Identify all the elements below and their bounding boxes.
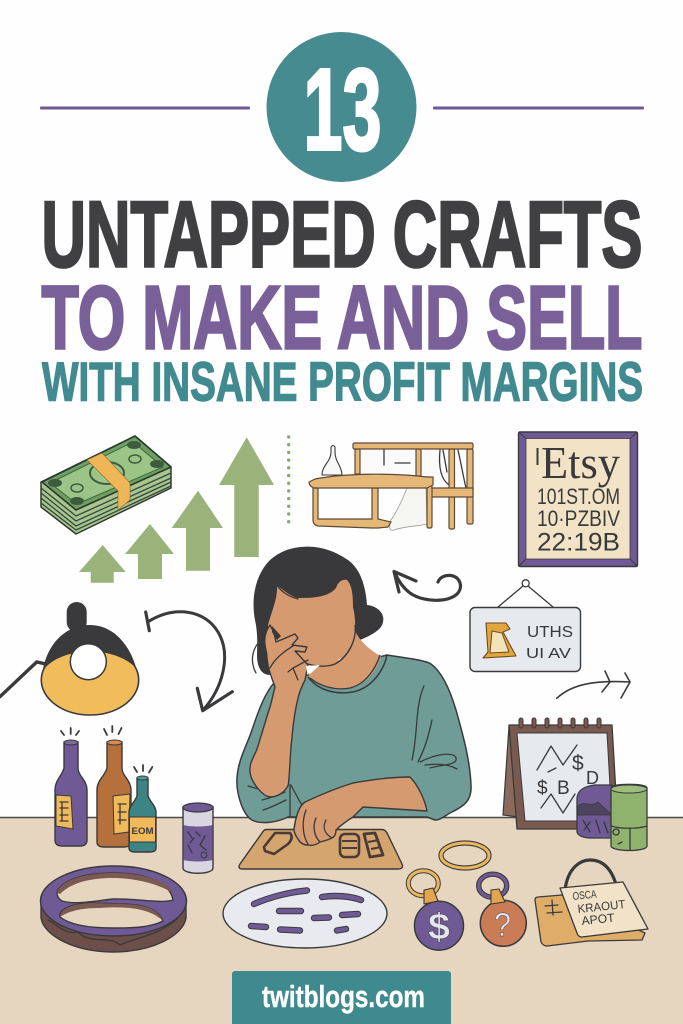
- icon: purple and green jars: [577, 784, 647, 850]
- icon: desk lamp: [0, 602, 139, 715]
- panel: framed Etsy sign: 10·PZBIV: [537, 506, 620, 531]
- icon: teal bottle: EOM: [132, 826, 154, 837]
- chart: four rising arrows: [79, 437, 274, 583]
- icon: purple bottle: [55, 728, 87, 846]
- icon: brown bottle: [97, 726, 131, 847]
- icon: calendar with doodles: B: [557, 778, 570, 799]
- icon: cutting board with pieces: [239, 830, 402, 869]
- icon: calendar with doodles: $: [537, 778, 548, 799]
- panel: framed Etsy sign: Etsy: [541, 438, 620, 488]
- icon: calendar with doodles: $: [572, 752, 584, 775]
- arrow: curved arrow down-left: [146, 612, 232, 711]
- icon: dollar keychain: $: [428, 906, 450, 947]
- icon: question mark keychain: ?: [494, 906, 511, 943]
- footer badge: website: twitblogs.com: [262, 979, 425, 1014]
- title: [42, 182, 643, 412]
- icon: question mark keychain: [479, 874, 526, 946]
- person: thoughtful crafter: [237, 547, 471, 845]
- hair: [254, 547, 383, 675]
- icon: plate with purple strips: [223, 879, 387, 948]
- panel: hanging sign: UTHS: [527, 624, 573, 641]
- icon: craft tables: [309, 443, 473, 531]
- icon: gold emblem: [483, 623, 516, 658]
- icon: folder with tag note: [535, 860, 648, 946]
- header: number badge with rules: 13: [304, 44, 382, 174]
- dotted divider line: [287, 437, 290, 526]
- right arm and hand: [294, 777, 427, 845]
- arrow: curly arrow toward person: [394, 572, 461, 600]
- table surface: [0, 817, 683, 1024]
- neck and collar: [308, 630, 381, 689]
- panel: framed Etsy sign: [518, 432, 638, 566]
- icon: folder with tag note: OSCA: [572, 888, 598, 903]
- icon: calendar with doodles: [503, 718, 618, 829]
- footer badge: website: [232, 971, 451, 1024]
- icon: jar with pattern: [183, 803, 213, 873]
- header: number badge with rules: [40, 32, 644, 182]
- panel: hanging sign: [470, 580, 580, 672]
- panel: hanging sign: UI AV: [526, 645, 571, 662]
- left arm and raised hand: [250, 625, 308, 797]
- icon: teal bottle: [129, 765, 156, 852]
- icon: dollar keychain: [408, 871, 464, 950]
- panel: framed Etsy sign: 101ST.OM: [537, 484, 620, 509]
- icon: gold ring: [441, 843, 489, 868]
- icon: large purple bangle: [40, 866, 186, 952]
- icon: stack of money: [41, 436, 171, 534]
- panel: framed Etsy sign: 22:19B: [537, 528, 620, 556]
- icon: folder with tag note: APOT: [581, 911, 616, 928]
- face: [268, 580, 355, 666]
- arrow: thin double-headed arrow: [557, 671, 630, 698]
- icon: folder with tag note: KRAOUT: [577, 897, 627, 916]
- icon: calendar with doodles: D: [586, 768, 599, 788]
- shirt: [237, 655, 471, 823]
